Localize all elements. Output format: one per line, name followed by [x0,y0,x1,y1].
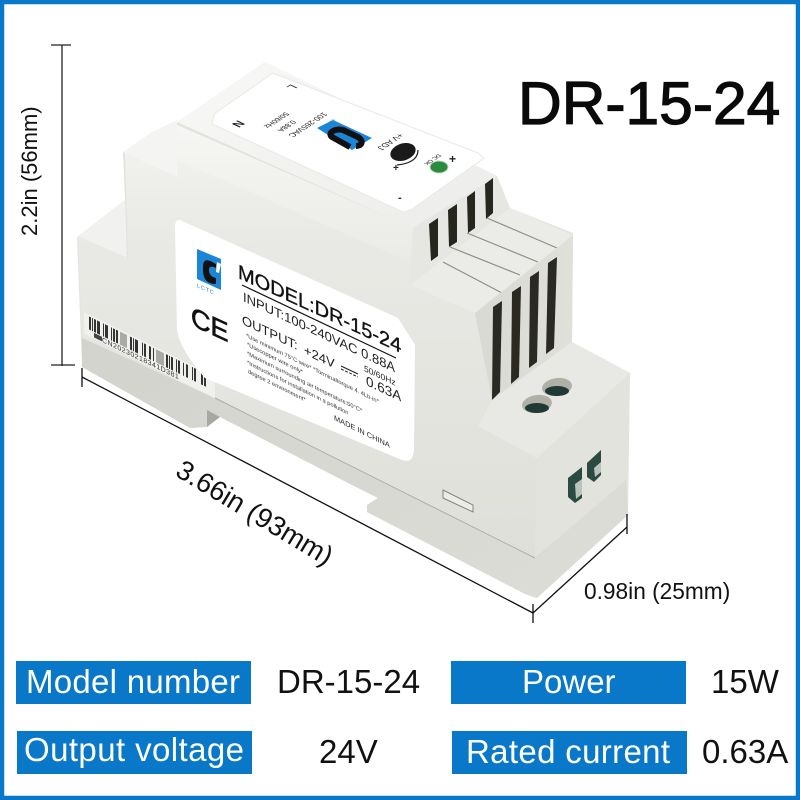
status LED [430,161,448,173]
silhouette [77,62,630,598]
title: DR-15-24 [518,69,780,137]
logo [197,249,221,297]
top label text: + [449,152,456,166]
spec: rated current [452,731,788,774]
spec: model number [16,661,420,704]
width text: 0.98in (25mm) [584,578,730,604]
made in china: MADE IN CHINA [334,413,391,450]
notch shadow [207,410,220,427]
barcode number: CN20230218341D381 [102,335,179,382]
barcode mark [94,333,102,341]
top label text: 50/60Hz [261,111,292,130]
height text: 2.2in (56mm) [17,106,42,236]
fine print: *Maximum surrounding air temperature:50°C* [247,351,363,415]
output voltage: +24V [304,343,336,372]
top face with label [177,62,497,228]
upper vent slots [429,178,493,261]
spec: output voltage [17,731,378,774]
lower fin side [475,235,573,400]
top label text [229,83,456,204]
label text: Model number [26,663,240,700]
length line [82,368,533,623]
top label text: DC OK [422,153,442,165]
front clip slot [443,490,473,512]
label text: Output voltage [24,731,244,768]
knob arrow [397,150,418,165]
fin separators [443,218,557,293]
label text: Rated current [466,733,670,770]
model line: MODEL:DR-15-24 [238,261,402,358]
frequency: 50/60Hz [364,363,396,388]
front face [78,125,537,558]
output label: OUTPUT: [242,313,298,353]
label plate [175,220,415,461]
upper fin side [410,176,510,285]
label chip [16,661,251,704]
side label [175,220,415,461]
value: 15W [711,663,780,700]
label text: Power [522,663,616,700]
input line: INPUT:100-240VAC 0.88A [243,290,396,376]
top label text: - [398,192,402,204]
left shoulder [77,200,127,262]
label chip [452,731,687,774]
length text: 3.66in (93mm) [171,454,339,571]
sticker background [84,312,215,398]
spec: power [451,661,780,704]
adjustment knob [388,140,418,164]
logo: LCTC [197,283,215,297]
top label text: 100-265VAC [286,111,330,139]
top label text: L [283,83,300,91]
underline [242,285,396,358]
fine print: *Instructions for installation in a pollution [247,360,348,417]
lower fins top surface [410,208,573,313]
rail seam [215,398,625,558]
left upper block top [123,120,177,177]
top label text: +V ADJ [375,132,407,151]
barcode sticker [84,312,215,399]
value: DR-15-24 [277,663,420,700]
fine print: *Use minimum 75°C wire* *Torminaltorque 4. 4Lb-in* [246,333,379,406]
screw holes [521,376,573,415]
dimension: width [533,514,730,613]
label chip [17,731,252,774]
CE mark: CE [191,301,228,349]
terminal step top [478,342,630,458]
lower rail [82,338,537,598]
top logo: LCTC [323,119,337,127]
right end lower [535,480,628,598]
dimension: length [82,368,533,623]
top logo [317,119,372,150]
top label text: + [393,163,399,174]
barcode gray patches [120,332,164,366]
height line [51,45,75,366]
terminal openings [568,450,601,503]
product photo: DIN rail power supply [77,62,630,598]
value: 24V [319,733,378,770]
top label text: 0.88A [275,119,299,133]
top face body [177,62,497,228]
right end face [535,373,630,558]
output current: 0.63A [366,374,402,406]
front highlight band [177,125,413,262]
top label text: N [229,119,247,128]
value: 0.63A [702,733,788,770]
top label [212,73,484,212]
lower vent slots [492,257,557,400]
dc symbol [341,366,358,377]
fine print: *Usecopper wire only* [247,342,304,376]
barcode bars [89,316,206,387]
fine print: degree 2 environment* [248,369,306,404]
label chip [451,661,686,704]
width line [533,514,627,613]
